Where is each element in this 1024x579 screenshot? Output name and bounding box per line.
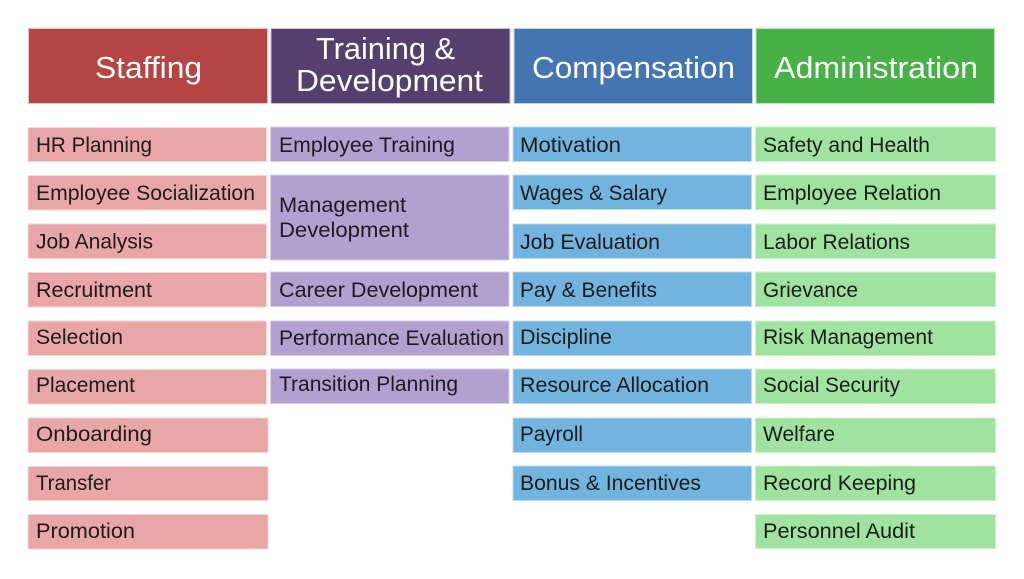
item: Wages & Salary: Wages & Salary <box>520 182 667 205</box>
item: Onboarding: Onboarding <box>36 423 152 446</box>
header: Staffing: Staffing <box>95 50 202 85</box>
item: Welfare: Welfare <box>763 423 835 446</box>
item: Job Analysis: Job Analysis <box>36 230 153 254</box>
item: Transition Planning <box>270 369 509 404</box>
item: Grievance <box>756 272 996 306</box>
item: Performance Evaluation <box>270 321 509 356</box>
header: Training & Development <box>271 28 510 104</box>
item: Pay & Benefits: Pay & Benefits <box>520 279 657 302</box>
item: Job Evaluation: Job Evaluation <box>520 231 660 254</box>
item: Risk Management: Risk Management <box>763 326 933 349</box>
item: Onboarding <box>28 418 268 452</box>
item: Pay & Benefits <box>513 272 752 306</box>
item: HR Planning: HR Planning <box>36 134 152 157</box>
item: Motivation <box>513 127 752 162</box>
item: Employee Relation: Employee Relation <box>763 182 941 205</box>
header: Compensation <box>514 28 752 104</box>
item: Employee Training <box>270 127 509 162</box>
item: Payroll <box>513 418 752 452</box>
item: Resource Allocation: Resource Allocation <box>520 374 709 397</box>
column: Administration <box>756 28 996 548</box>
header: Administration: Administration <box>774 50 978 85</box>
item: Social Security <box>756 369 996 404</box>
item: Transition Planning: Transition Planning <box>279 373 458 396</box>
item: Resource Allocation <box>513 369 752 404</box>
item: Employee Socialization <box>28 176 266 210</box>
item: Job Evaluation <box>513 224 752 258</box>
item: Promotion <box>28 514 268 549</box>
item: Employee Relation <box>756 175 996 210</box>
header: Training & Development: Development <box>296 63 483 98</box>
item: Social Security: Social Security <box>763 374 900 397</box>
header: Training & Development: Training & <box>316 31 455 66</box>
header: Staffing <box>28 28 268 104</box>
item: Placement: Placement <box>36 374 135 397</box>
header: Compensation: Compensation <box>532 50 735 85</box>
item: Transfer <box>28 466 268 500</box>
item: Recruitment: Recruitment <box>36 279 152 302</box>
item: Management Development: Management <box>279 194 406 217</box>
item: Payroll: Payroll <box>520 423 583 446</box>
item: Discipline: Discipline <box>520 326 612 349</box>
item: Personnel Audit <box>756 514 996 548</box>
column: Staffing <box>28 28 268 549</box>
header: Administration <box>756 28 994 104</box>
item: Record Keeping <box>756 466 996 500</box>
item: Risk Management <box>756 321 996 356</box>
item: Performance Evaluation: Performance Evaluation <box>279 327 504 350</box>
item: Personnel Audit: Personnel Audit <box>763 520 915 543</box>
item: Bonus & Incentives <box>513 466 752 500</box>
item: Safety and Health: Safety and Health <box>763 134 930 157</box>
item: Labor Relations: Labor Relations <box>763 231 910 254</box>
item: Employee Socialization: Employee Socialization <box>36 182 255 205</box>
item: Recruitment <box>28 272 266 307</box>
item: Wages & Salary <box>513 175 752 210</box>
item: Grievance: Grievance <box>763 279 858 302</box>
item: Career Development: Career Development <box>279 279 478 302</box>
column: Compensation <box>513 28 752 500</box>
item: Record Keeping: Record Keeping <box>763 472 916 495</box>
item: Selection: Selection <box>36 326 123 349</box>
item: Job Analysis <box>28 224 266 258</box>
item: Selection <box>28 321 266 356</box>
item: Discipline <box>513 321 752 356</box>
item: Transfer: Transfer <box>36 472 111 495</box>
item: Management Development <box>270 175 509 260</box>
item: Career Development <box>270 272 509 306</box>
item: Labor Relations <box>756 224 996 258</box>
item: Safety and Health <box>756 127 996 162</box>
item: Welfare <box>756 418 996 452</box>
item: Motivation: Motivation <box>520 134 621 157</box>
item: Management Development: Development <box>279 219 409 242</box>
column: Training & Development <box>270 28 510 404</box>
item: Placement <box>28 370 266 404</box>
item: Bonus & Incentives: Bonus & Incentives <box>520 472 701 495</box>
item: Promotion: Promotion <box>36 520 135 543</box>
item: Employee Training: Employee Training <box>279 134 455 157</box>
item: HR Planning <box>28 128 266 162</box>
